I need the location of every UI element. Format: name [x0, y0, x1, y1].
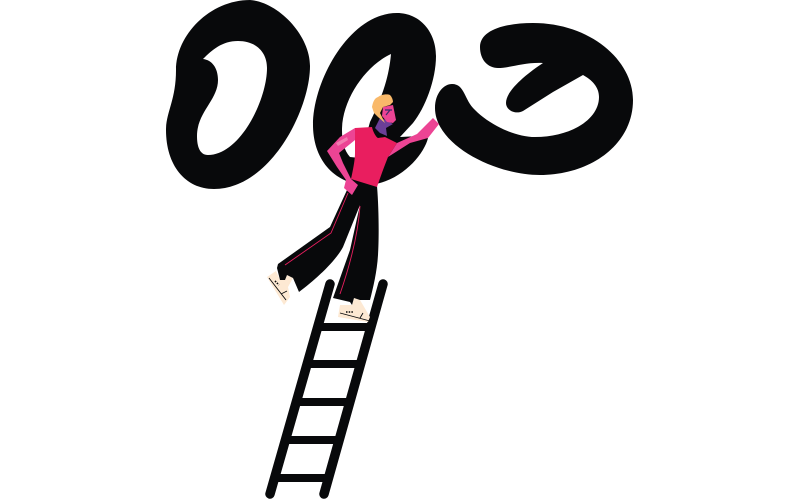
glasses	[385, 110, 392, 115]
person	[267, 94, 439, 322]
trouser side stripes	[285, 193, 360, 294]
neck	[375, 118, 393, 136]
ladder rails	[270, 284, 383, 494]
arm highlight	[336, 137, 348, 146]
digit: first 0	[166, 0, 310, 189]
shirt	[351, 127, 397, 187]
trousers	[277, 180, 379, 305]
digit: 3	[435, 23, 633, 175]
shoe: raised foot	[267, 271, 293, 305]
digit: second 0	[313, 13, 436, 185]
ladder rungs	[276, 327, 371, 478]
right arm	[388, 118, 439, 157]
ladder	[270, 284, 383, 494]
face	[382, 105, 396, 123]
left arm	[327, 128, 358, 195]
shoe: standing foot	[338, 298, 370, 322]
hair	[372, 94, 393, 123]
